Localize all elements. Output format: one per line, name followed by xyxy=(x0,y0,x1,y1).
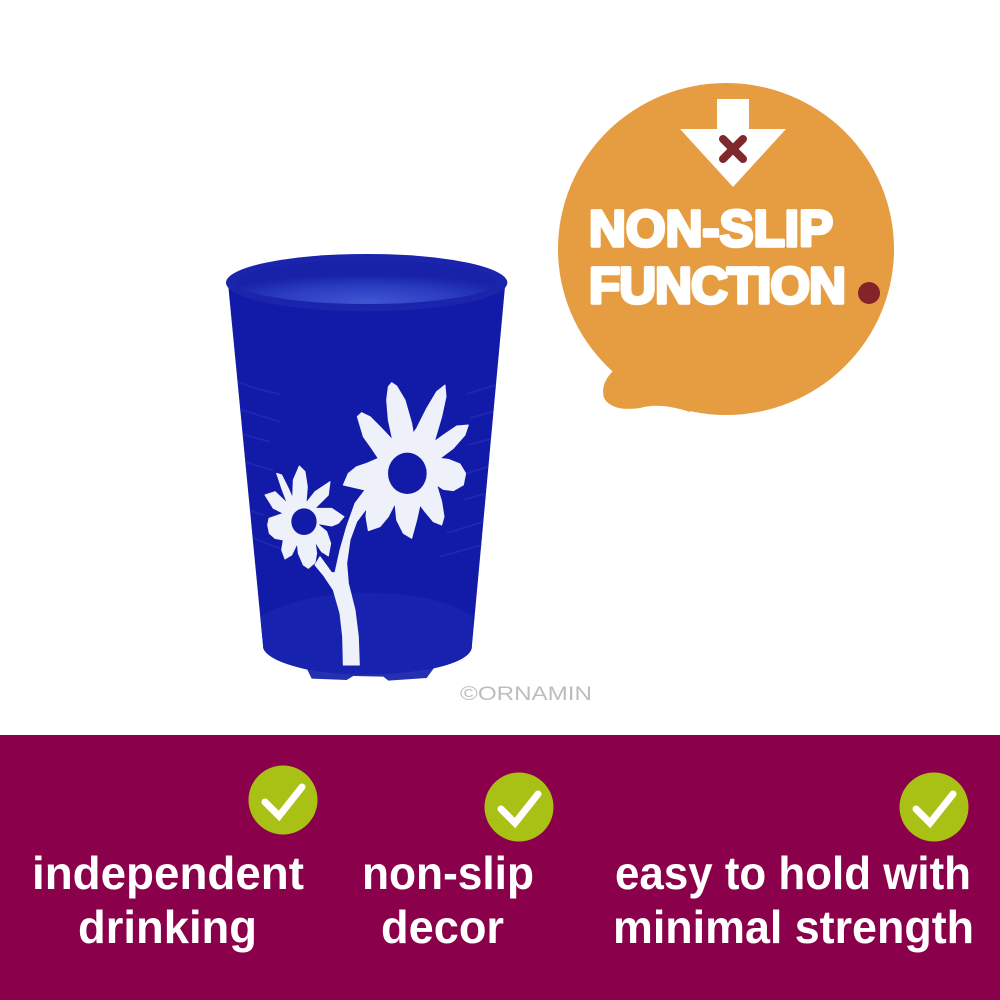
icon: downward arrow xyxy=(680,99,786,187)
cup feet xyxy=(307,667,435,681)
cup ridges xyxy=(233,380,500,557)
label xyxy=(613,847,974,953)
benefit: independent drinking xyxy=(32,766,318,953)
badge title: FUNCTION xyxy=(589,257,846,314)
cup body xyxy=(228,287,505,674)
copyright watermark: ©ORNAMIN xyxy=(460,684,592,705)
label: non-slip xyxy=(362,847,534,899)
benefit: easy to hold with minimal strength xyxy=(613,772,974,953)
label: independent xyxy=(32,847,304,899)
badge title: NON-SLIP xyxy=(589,200,833,257)
product: blue cup with flower decor xyxy=(226,254,507,681)
label: decor xyxy=(381,901,504,953)
small flower xyxy=(265,466,344,568)
icon: check xyxy=(248,766,318,834)
badge title xyxy=(589,200,846,314)
badge: non-slip function xyxy=(558,83,894,415)
label xyxy=(362,847,534,953)
label: easy to hold with xyxy=(615,847,971,899)
icon: cross xyxy=(723,139,743,159)
label xyxy=(32,847,304,953)
flower centres xyxy=(291,453,427,535)
benefit: non-slip decor xyxy=(362,772,554,953)
icon: check xyxy=(900,772,968,842)
cup opening xyxy=(237,260,496,304)
large and small flower xyxy=(265,383,468,665)
icon: check xyxy=(484,772,554,842)
badge dot xyxy=(858,282,880,304)
badge speech bubble xyxy=(558,83,894,415)
benefits band xyxy=(0,735,1000,1000)
label: minimal strength xyxy=(613,901,974,953)
large flower and stem xyxy=(315,383,468,665)
cup base shading xyxy=(260,593,473,674)
label: drinking xyxy=(78,901,257,953)
cup rim xyxy=(226,254,507,311)
